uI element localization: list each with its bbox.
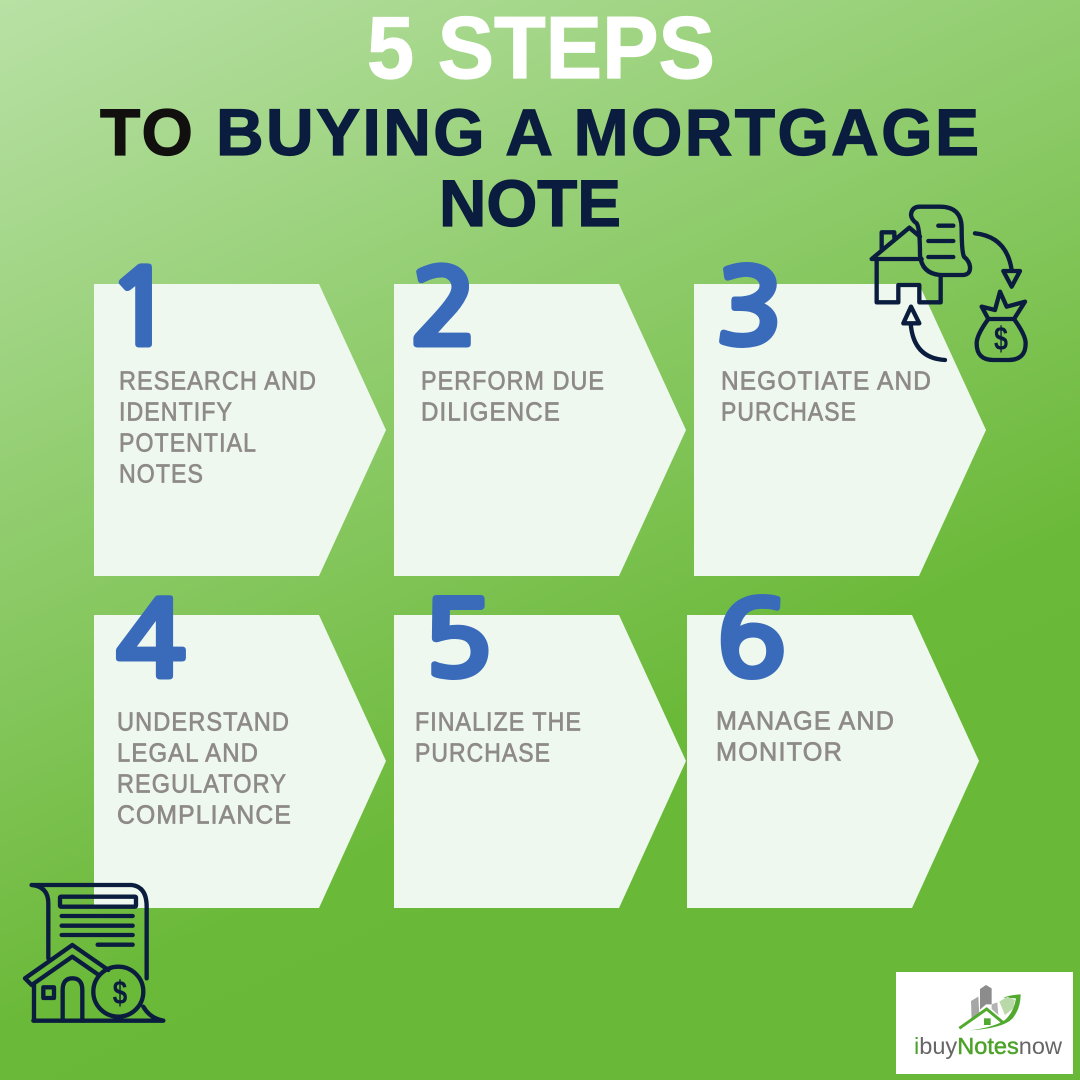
label 3: [721, 366, 932, 426]
arrow card 3: [694, 284, 986, 576]
label 6: MANAGE AND: [716, 706, 895, 736]
label 1: IDENTIFY: [119, 396, 233, 426]
number 3: 3: [714, 257, 784, 361]
label 4: COMPLIANCE: [117, 800, 292, 830]
panel: step 5: [394, 589, 686, 908]
panel: step 3: [694, 257, 986, 576]
label 2: DILIGENCE: [421, 396, 561, 426]
title line: note: NOTE: [439, 166, 621, 240]
number 6: 6: [716, 589, 788, 693]
label 2: [421, 366, 605, 426]
label 2: PERFORM DUE: [421, 366, 605, 396]
panel: step 1: [94, 257, 386, 576]
label 6: [716, 706, 895, 766]
icon: house, note and money bag cycle: $: [994, 321, 1008, 358]
label 5: PURCHASE: [415, 738, 551, 768]
label 4: UNDERSTAND: [117, 706, 290, 736]
number 4: 4: [115, 589, 187, 693]
logo wordmark: ibuyNotesnow: [914, 1033, 1062, 1059]
arrow card 1: [94, 284, 386, 576]
panel: step 6: [687, 589, 979, 908]
number 2: 2: [409, 257, 479, 361]
number 1: 1: [106, 257, 176, 361]
label 3: PURCHASE: [721, 396, 857, 426]
label 4: REGULATORY: [117, 768, 287, 798]
logo: ibuyNotesnow: [896, 972, 1073, 1074]
label 3: NEGOTIATE AND: [721, 366, 932, 396]
logo mark: [959, 985, 1021, 1030]
title: [100, 0, 979, 240]
arrow card 6: [687, 615, 979, 908]
title line: to buying a mortgage: TO BUYING A MORTGAGE: [100, 95, 979, 169]
arrow card 5: [394, 615, 686, 908]
label 1: POTENTIAL: [119, 428, 257, 458]
number 5: 5: [422, 589, 494, 693]
icon: house, note and money bag cycle: [872, 207, 1026, 360]
label 5: FINALIZE THE: [415, 706, 582, 736]
logo background: [896, 972, 1073, 1074]
label 6: MONITOR: [716, 736, 843, 766]
label 1: RESEARCH AND: [119, 366, 317, 396]
icon: mortgage document with house and coin: $: [113, 975, 128, 1012]
panel: step 4: [94, 589, 386, 908]
icon: mortgage document with house and coin: [25, 885, 163, 1021]
title line: 5 steps: 5 STEPS: [367, 0, 715, 97]
arrow card 2: [394, 284, 686, 576]
label 1: [119, 366, 317, 488]
label 1: NOTES: [119, 458, 204, 488]
arrow card 4: [94, 615, 386, 908]
label 4: LEGAL AND: [117, 738, 259, 768]
label 5: [415, 706, 582, 768]
label 4: [117, 706, 292, 830]
panel: step 2: [394, 257, 686, 576]
